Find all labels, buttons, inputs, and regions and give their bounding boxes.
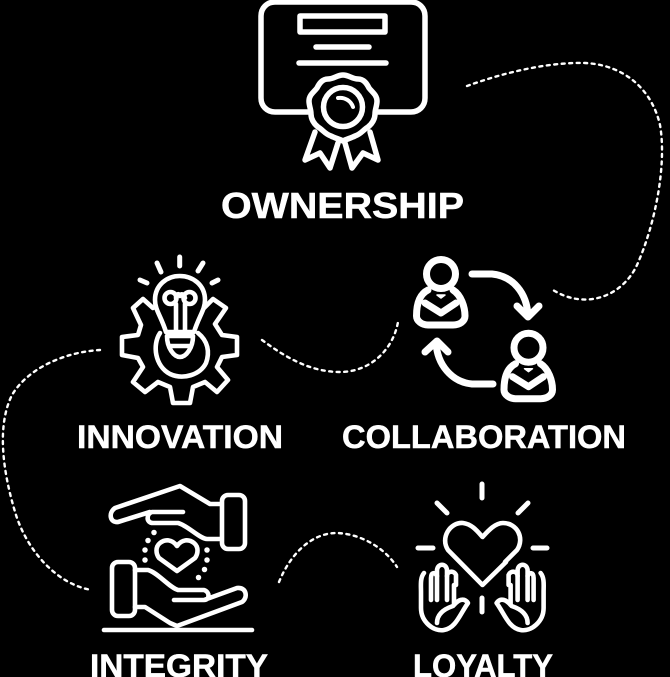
heading: collaboration: COLLABORATION	[342, 419, 626, 455]
left hand	[421, 565, 468, 630]
dotted connector: integrity to loyalty	[279, 533, 397, 582]
icon: hands with heart	[104, 486, 252, 630]
icon: collaboration	[416, 260, 552, 399]
person one	[416, 260, 465, 325]
dotted connector: innovation to integrity	[3, 350, 100, 590]
dotted connector: ownership to collaboration	[467, 63, 662, 300]
heading: innovation: INNOVATION	[77, 419, 283, 455]
icon: certificate	[261, 2, 425, 168]
icon: loyalty hands and heart	[418, 484, 547, 630]
heading: ownership: OWNERSHIP	[221, 185, 464, 226]
dotted connector: innovation to collaboration	[262, 322, 398, 372]
person two	[504, 333, 552, 399]
arrow: bottom	[425, 341, 493, 384]
right hand	[497, 565, 544, 630]
icon: lightbulb gear	[122, 257, 237, 403]
arrow: top	[472, 274, 539, 317]
